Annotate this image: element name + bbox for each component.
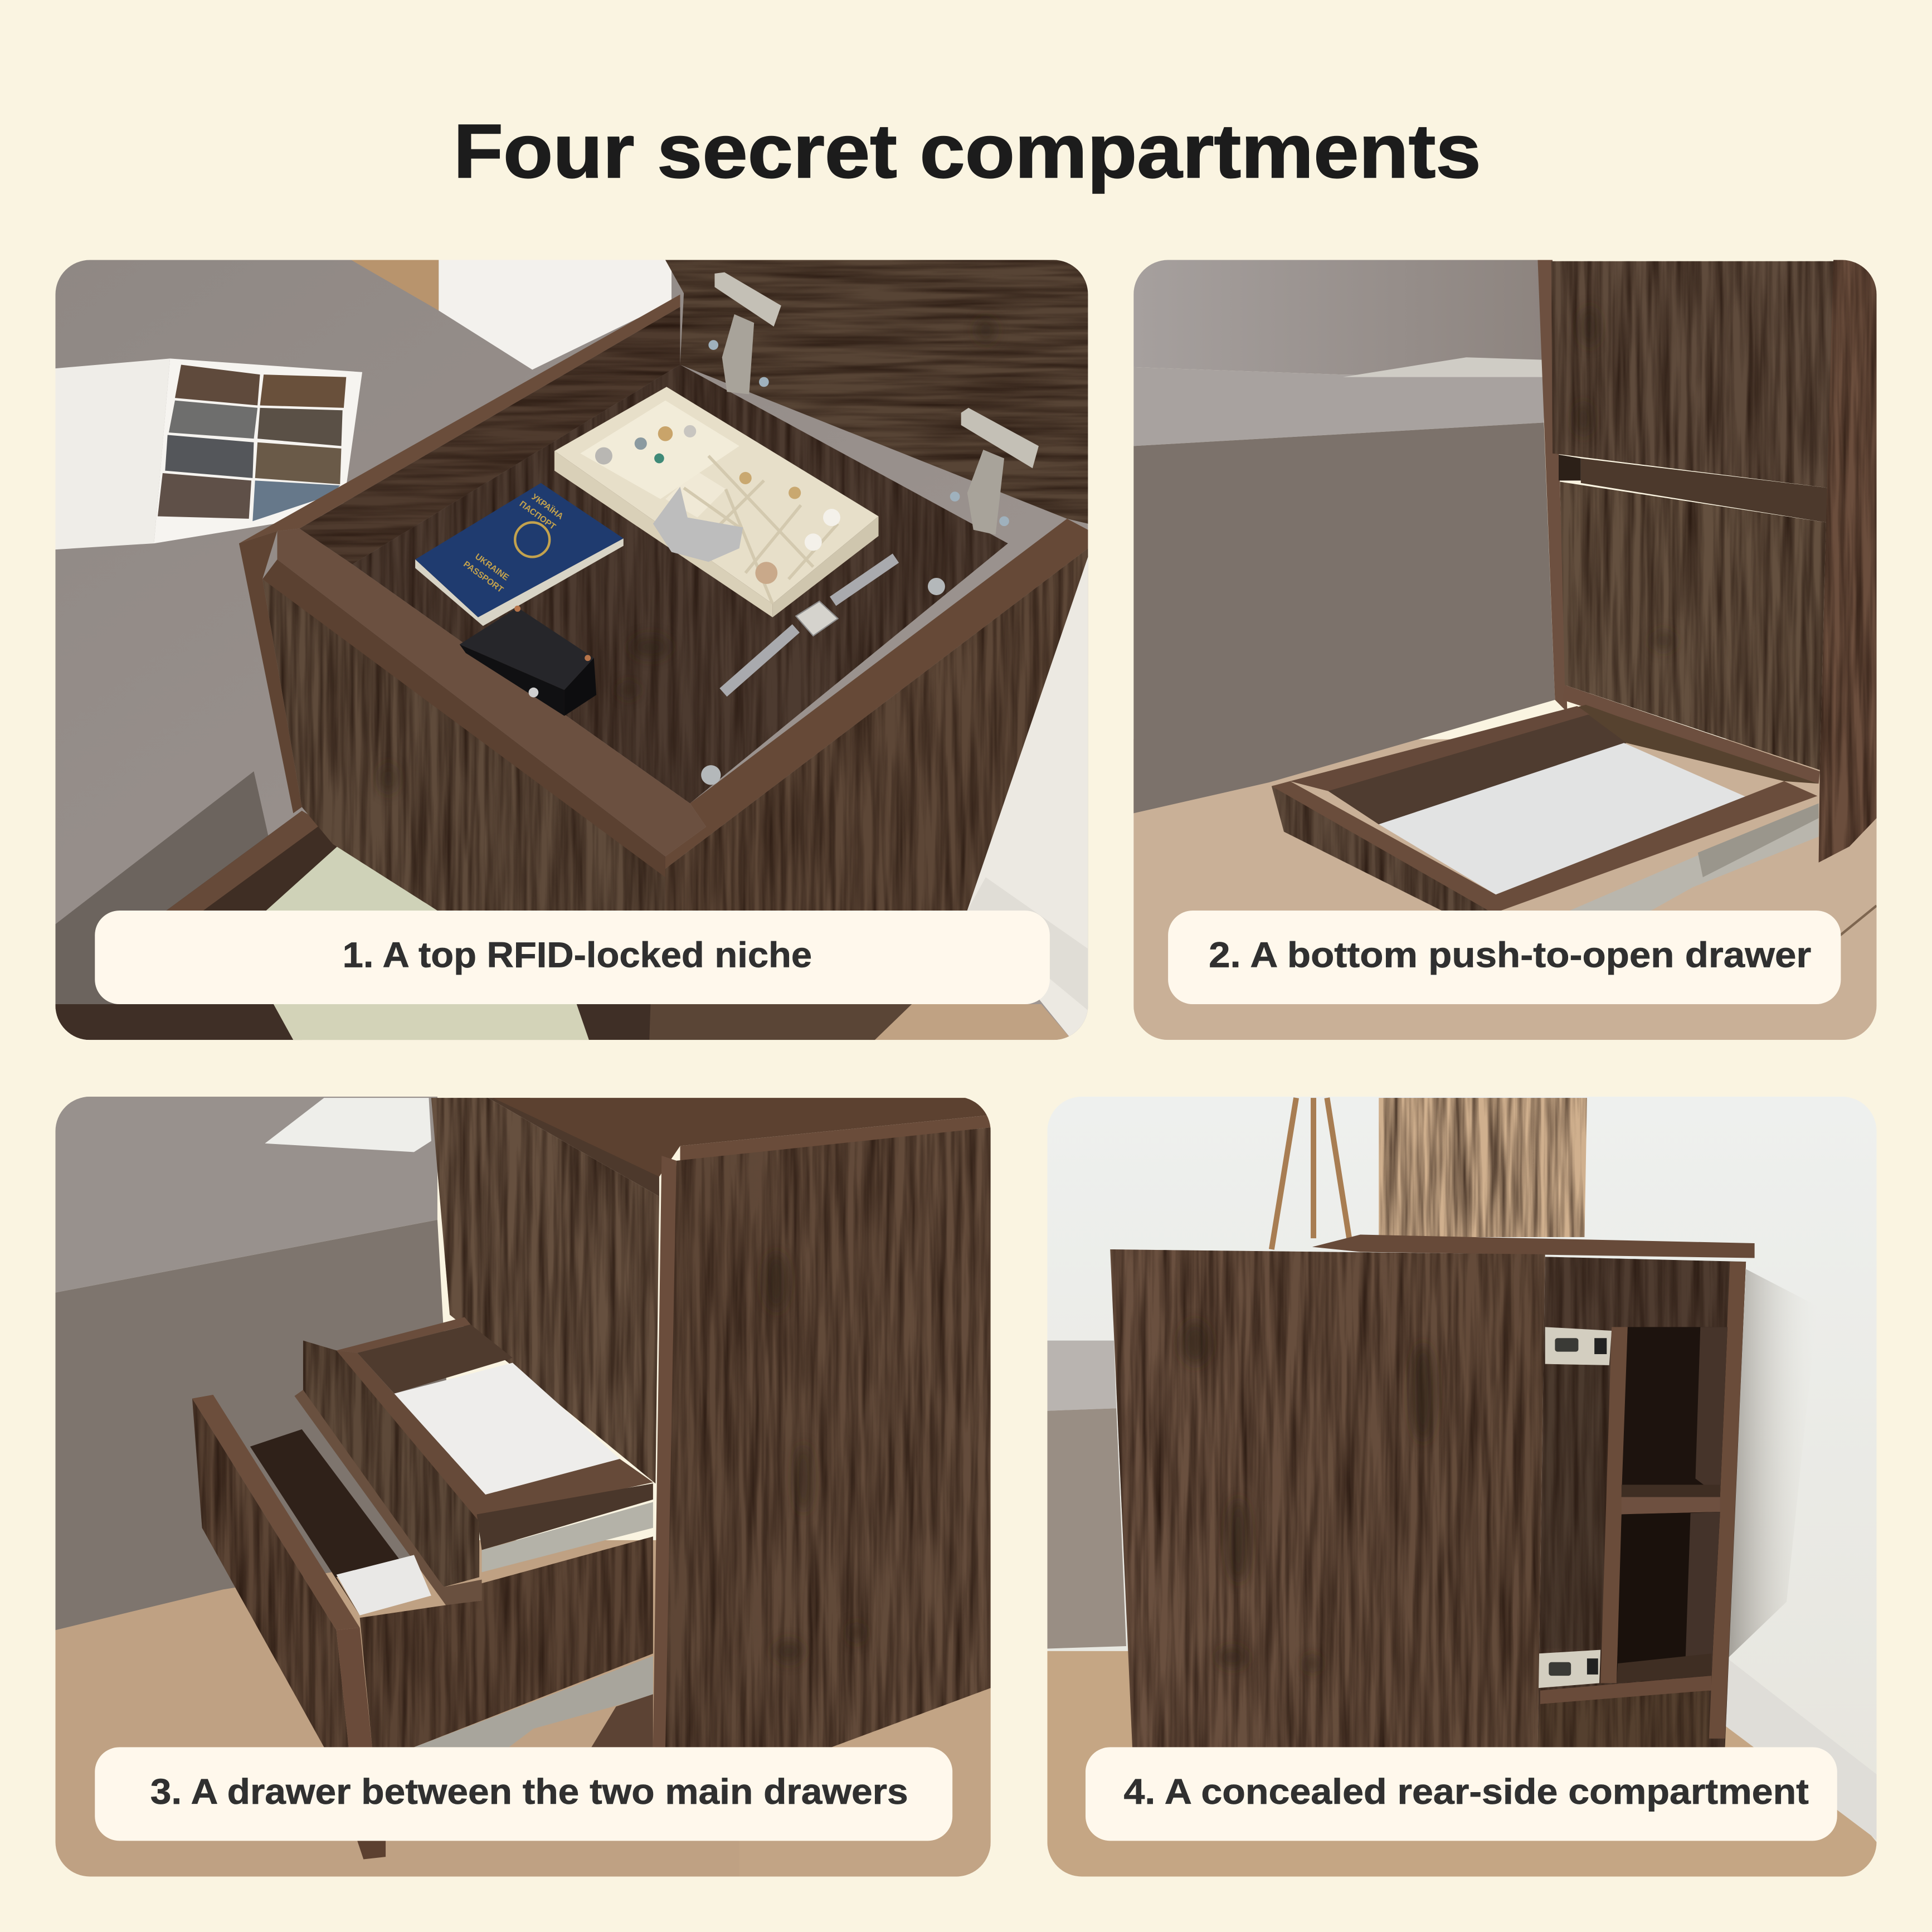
caption 2: 2. A bottom push-to-open drawer <box>1209 935 1811 975</box>
caption 3: 3. A drawer between the two main drawers <box>150 1772 908 1812</box>
vertical divider <box>1600 1327 1628 1683</box>
sofa front face <box>55 771 302 1040</box>
wall shadow <box>1727 1269 1817 1658</box>
white wall behind <box>439 260 671 369</box>
middle drawer white floor <box>395 1362 620 1495</box>
sofa seat <box>1047 1341 1116 1411</box>
cabinet top <box>493 1098 991 1177</box>
open book <box>55 358 362 549</box>
panel 1: top RFID-locked niche <box>55 260 1088 1040</box>
floor <box>1133 739 1877 1040</box>
drawer back wall <box>1290 705 1819 824</box>
title: Four secret compartments <box>454 109 1481 194</box>
lower drawer front outer <box>192 1399 349 1747</box>
right side face <box>665 548 1088 911</box>
lower drawer white floor <box>337 1555 431 1615</box>
lower slide <box>414 1656 653 1747</box>
middle drawer inner wall <box>357 1325 513 1394</box>
drawer side rim <box>1272 781 1817 914</box>
bottom rail <box>1540 1676 1711 1704</box>
lower drawer inner <box>250 1429 402 1615</box>
right post <box>1819 260 1877 863</box>
lower drawer rim <box>166 811 323 911</box>
fascia bottom below caption <box>357 1841 386 1860</box>
RFID lock box <box>460 606 596 716</box>
blond wood panel <box>1379 1098 1587 1237</box>
passport <box>415 483 624 626</box>
lower drawer side <box>360 1536 653 1747</box>
front strip <box>653 1156 677 1747</box>
right rim <box>665 519 1088 869</box>
front rim <box>277 529 706 856</box>
floor <box>55 1540 991 1877</box>
left post <box>1537 260 1568 712</box>
wristwatch <box>723 558 896 693</box>
wood knots <box>379 318 996 794</box>
lower rail <box>1563 685 1820 783</box>
sofa top <box>55 1097 437 1292</box>
panel 4: concealed rear-side compartment <box>1047 1097 1877 1877</box>
side wood under label <box>649 1004 912 1040</box>
caption 4 <box>1086 1747 1837 1841</box>
wood knots <box>1575 307 1676 650</box>
silver cuff <box>653 486 743 562</box>
left face of cabinet <box>431 1098 659 1483</box>
left rim <box>239 294 680 543</box>
sofa seat <box>1133 367 1544 446</box>
passport: ПАСПОРТ <box>518 499 558 532</box>
lower drawer opening <box>166 811 444 911</box>
caption 3 <box>95 1747 952 1841</box>
lower drawer front <box>1560 482 1826 770</box>
white wall right <box>967 557 1088 1040</box>
thin strip <box>294 1390 482 1605</box>
panel 2: bottom push-to-open drawer <box>1133 260 1877 1040</box>
tripod legs <box>1272 1098 1349 1249</box>
wood knots <box>764 1252 864 1662</box>
lower slide <box>1537 1650 1600 1688</box>
wall <box>1047 1097 1877 1877</box>
rear outer strip <box>1709 1262 1746 1739</box>
middle drawer front <box>303 1341 479 1587</box>
caption 1: 1. A top RFID-locked niche <box>343 935 812 975</box>
upper drawer front <box>1551 261 1833 488</box>
banknotes in lower drawer <box>266 844 437 911</box>
gap between drawers <box>1581 459 1828 523</box>
shelf <box>1622 1497 1720 1514</box>
passport: PASSPORT <box>461 559 505 595</box>
lid raised open <box>665 260 1088 524</box>
cabinet left post <box>239 531 302 813</box>
caption 2 <box>1168 911 1841 1004</box>
top edge <box>680 1115 991 1162</box>
dark handle slot <box>1559 455 1581 480</box>
screws <box>701 578 945 785</box>
wood under slide <box>591 1694 653 1747</box>
big side panel <box>1110 1249 1545 1747</box>
lower drawer top edge <box>192 1395 360 1630</box>
middle drawer rim <box>337 1350 653 1522</box>
middle drawer back rim <box>337 1317 471 1353</box>
caption 4: 4. A concealed rear-side compartment <box>1124 1772 1809 1812</box>
sofa front <box>1133 422 1555 813</box>
sofa front <box>1047 1408 1126 1648</box>
sofa front <box>55 1220 456 1630</box>
big side face <box>655 1127 991 1747</box>
lower drawer edge strip <box>337 1628 372 1747</box>
lower niche <box>1617 1512 1720 1683</box>
book on sofa <box>1343 357 1544 377</box>
panel 3: drawer between main drawers <box>55 1097 991 1877</box>
blond wood post <box>351 260 439 310</box>
drawer front face <box>262 579 665 911</box>
floor crack <box>1823 906 1877 949</box>
inner back wall <box>1328 714 1627 824</box>
upper slide <box>1545 1327 1612 1365</box>
floor bottom right <box>869 1004 1072 1040</box>
cabinet rear body <box>1537 1257 1746 1747</box>
floor right corner <box>739 1688 991 1877</box>
lower strip under label <box>55 1004 912 1040</box>
middle slide <box>482 1502 653 1572</box>
upper niche <box>1622 1327 1727 1497</box>
top board <box>1312 1235 1755 1258</box>
floor <box>1047 1651 1877 1877</box>
caption 1 <box>95 911 1050 1004</box>
hinge upper <box>708 272 781 395</box>
drawer top edge <box>262 559 665 877</box>
banknotes under label <box>274 1004 589 1040</box>
hinge lower <box>950 408 1039 535</box>
baseboard <box>1722 1658 1877 1839</box>
inner left drawer back <box>1540 1365 1609 1648</box>
metal slide <box>1570 804 1819 911</box>
middle drawer side <box>477 1483 653 1550</box>
baseboard <box>967 877 1088 1010</box>
drawer white floor <box>1379 743 1750 894</box>
open book <box>265 1098 431 1152</box>
wood knots <box>1180 1321 1435 1672</box>
passport: UKRAINE <box>473 552 510 582</box>
passport: УКРАЇНА <box>530 492 565 522</box>
side wall of niche <box>299 307 680 564</box>
sofa back <box>1133 260 1542 377</box>
niche floor <box>352 364 1008 804</box>
bottom wood section <box>1537 1691 1709 1747</box>
jewellery tray <box>554 387 879 617</box>
drawer front face <box>1272 786 1488 911</box>
sofa seat top <box>55 260 1088 1040</box>
drawer outer wall <box>1272 706 1589 791</box>
dark strip <box>488 1098 659 1196</box>
